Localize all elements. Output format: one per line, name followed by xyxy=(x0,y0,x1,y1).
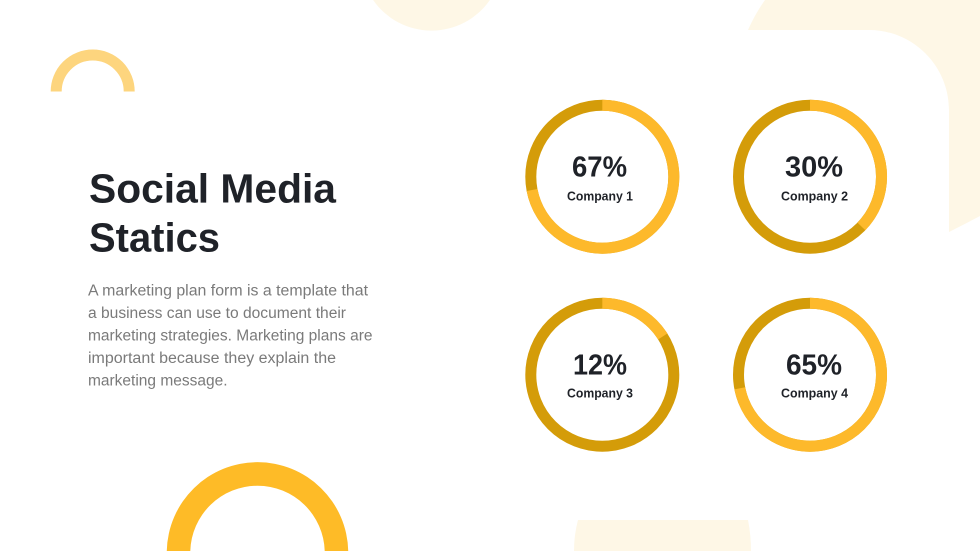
title: Social Media xyxy=(89,166,337,212)
panel: company 1 ring chart xyxy=(531,105,674,248)
ring segment: company 2 xyxy=(810,105,881,226)
ring segment: company 1 xyxy=(532,105,674,248)
body text: A marketing plan form is a template that xyxy=(88,283,369,300)
ring segment: company 4 xyxy=(740,303,881,446)
title: Statics xyxy=(89,214,220,260)
label: company 3: Company 3 xyxy=(567,387,633,401)
background shape: bottom cream tab xyxy=(574,520,751,551)
panel: company 4 ring chart xyxy=(738,303,882,446)
label: company 4: Company 4 xyxy=(781,387,848,401)
value: company 1: 67% xyxy=(572,152,627,184)
label: company 2: Company 2 xyxy=(781,190,848,204)
label: company 1: Company 1 xyxy=(567,190,633,204)
background shape: top cream circle xyxy=(373,0,490,31)
body text: important because they explain the xyxy=(88,350,336,367)
background shape: top-right cream corner xyxy=(748,0,980,232)
value: company 2: 30% xyxy=(785,152,843,184)
panel: company 2 ring chart xyxy=(738,105,882,248)
body text: marketing strategies. Marketing plans are xyxy=(88,328,372,345)
decorative ring: bottom yellow xyxy=(167,462,348,551)
value: company 4: 65% xyxy=(786,349,842,381)
value: company 3: 12% xyxy=(573,349,627,381)
body text: a business can use to document their xyxy=(88,305,346,322)
panel: company 3 ring chart xyxy=(531,303,674,446)
body text xyxy=(88,283,372,389)
title xyxy=(89,166,337,260)
ring segment: company 3 xyxy=(602,303,663,336)
body text: marketing message. xyxy=(88,372,228,389)
decorative arc: top-left light yellow xyxy=(56,55,129,92)
